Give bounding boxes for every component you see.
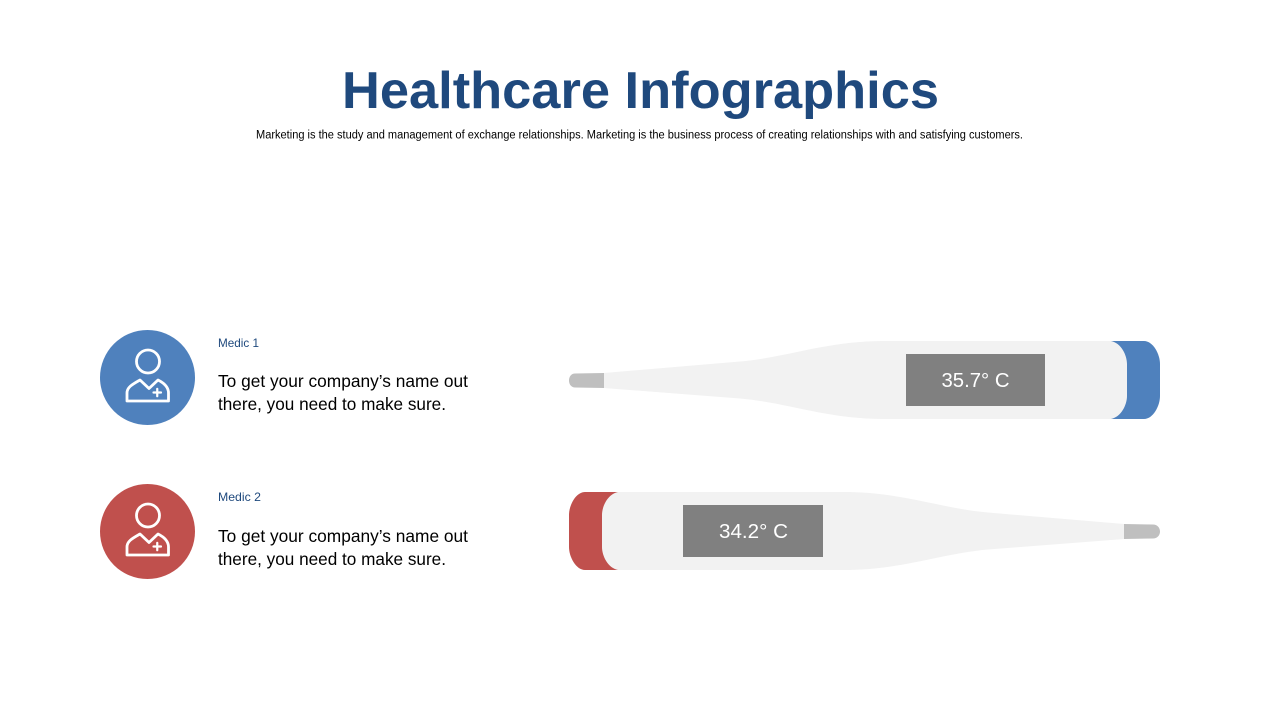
text block: medic 2: To get your company’s name out: [218, 526, 468, 546]
cap: [569, 492, 624, 570]
title: Healthcare Infographics: [342, 62, 939, 120]
panel: medic 2: [100, 484, 468, 579]
label: medic 1: Medic 1: [218, 336, 259, 350]
text block: medic 2: there, you need to make sure.: [218, 549, 446, 569]
body: [602, 492, 1124, 570]
thermometer: red: [569, 492, 1160, 570]
text block: medic 1: there, you need to make sure.: [218, 394, 446, 414]
reading: 35.7° C: [942, 370, 1010, 392]
subtitle: Marketing is the study and management of exchange relationships. Marketing is the business process of creating relationships with and satisfying customers.: [256, 130, 1023, 142]
display: [683, 505, 823, 557]
thermometer: blue: [569, 341, 1160, 419]
text block: medic 1: [218, 371, 468, 414]
tip: [569, 373, 604, 388]
display: [906, 354, 1045, 406]
text block: medic 2: [218, 526, 468, 569]
tip: [1124, 524, 1160, 539]
reading: 34.2° C: [719, 521, 788, 543]
icon: medic 1: [100, 330, 195, 425]
icon: medic 2: [100, 484, 195, 579]
cap: [1105, 341, 1160, 419]
text block: medic 1: To get your company’s name out: [218, 371, 468, 391]
panel: medic 1: [100, 330, 468, 425]
body: [604, 341, 1127, 419]
label: medic 2: Medic 2: [218, 490, 261, 504]
